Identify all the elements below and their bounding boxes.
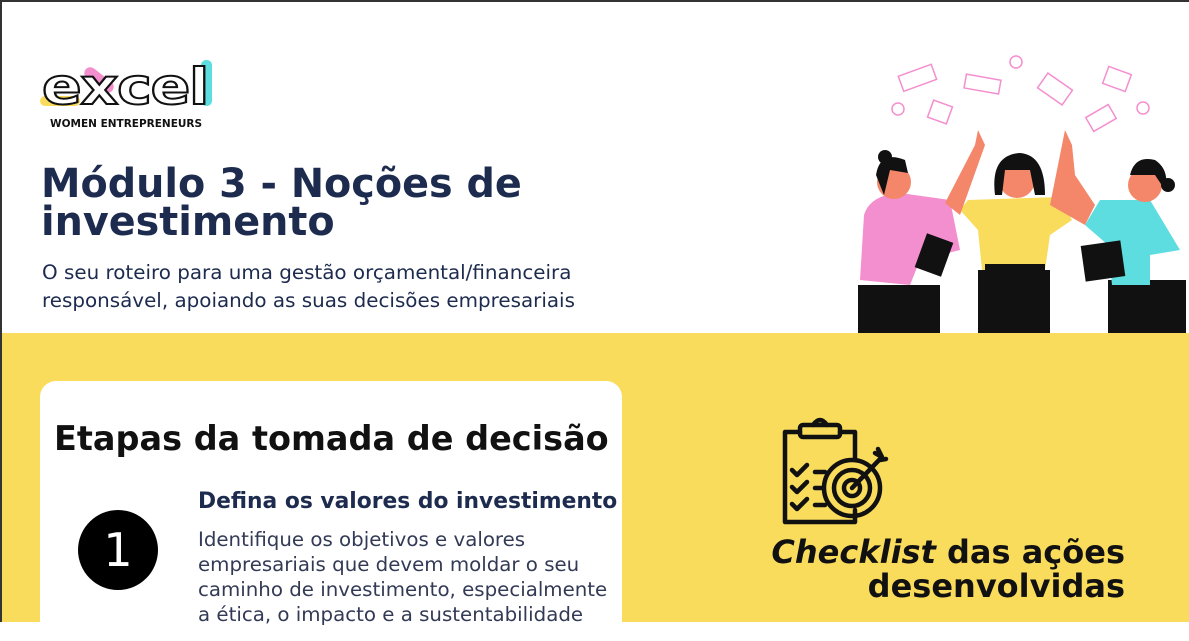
panel: decision steps [40, 381, 622, 641]
logo: WOMEN ENTREPRENEURS [50, 118, 202, 130]
title: investimento [41, 199, 335, 245]
title: Módulo 3 - Noções de [41, 161, 522, 207]
checklist heading [771, 533, 1125, 605]
checklist heading: Checklist das ações [771, 533, 1125, 571]
step 1 text: caminho de investimento, especialmente [198, 578, 607, 601]
icon: checklist with target [782, 418, 888, 524]
icon: number 1 [78, 510, 158, 590]
subtitle: O seu roteiro para uma gestão orçamental/financeira [42, 261, 571, 284]
yellow background panel [2, 333, 1189, 622]
step 1 text: Identifique os objetivos e valores [198, 528, 525, 551]
step 1 text: a ética, o impacto e a sustentabilidade [198, 603, 583, 626]
step 1 text: empresariais que devem moldar o seu [198, 553, 579, 576]
heading: steps: Etapas da tomada de decisão [54, 419, 609, 458]
subtitle [42, 261, 575, 312]
title [41, 161, 522, 245]
step 1 heading: Defina os valores do investimento [198, 489, 617, 514]
logo [40, 58, 212, 130]
step 1 text [198, 528, 607, 626]
illustration: three women high-fiving [858, 55, 1186, 333]
checklist heading: desenvolvidas [868, 567, 1125, 605]
icon: number 1: 1 [103, 523, 133, 577]
subtitle: responsável, apoiando as suas decisões empresariais [42, 289, 575, 312]
